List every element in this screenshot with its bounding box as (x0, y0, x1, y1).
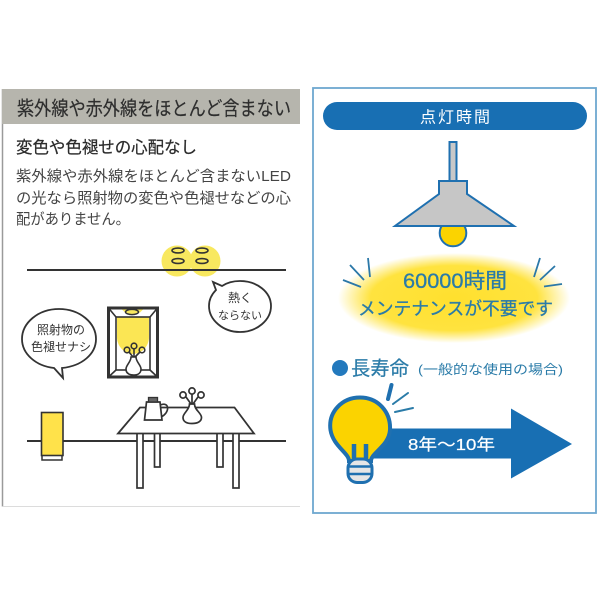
picture frame with vase (108, 308, 158, 377)
long life heading: (一般的な使用の場合) (418, 361, 563, 377)
body text: の光なら照射物の変色や色褪せなどの心 (16, 190, 291, 207)
vase on table (180, 388, 204, 424)
icon: light bulb (330, 385, 413, 482)
panel: left, no UV or IR (2, 89, 300, 507)
heading pill (323, 102, 587, 130)
glow with rays and message (338, 253, 570, 343)
body text: 紫外線や赤外線をほとんど含まないLED (16, 168, 291, 185)
long life heading (332, 358, 563, 380)
heading pill: 点灯時間 (420, 108, 490, 126)
speech bubble: no fading: 色褪せナシ (31, 340, 91, 354)
icon: pendant lamp (395, 142, 514, 246)
heading band: 紫外線や赤外線をほとんど含まない (17, 98, 291, 120)
speech bubble: not hot: 熱く (228, 291, 252, 305)
arrow: 8 to 10 years (368, 408, 572, 478)
glow with rays and message: 60000時間 (403, 270, 507, 293)
glow with rays and message: メンテナンスが不要です (358, 299, 553, 319)
speech bubble: not hot (209, 281, 271, 332)
subheading: 変色や色褪せの心配なし (16, 139, 197, 157)
body text (16, 168, 291, 228)
floor lamp (42, 412, 63, 460)
speech bubble: not hot: ならない (218, 309, 262, 322)
long life heading: 長寿命 (351, 358, 409, 380)
table (118, 408, 254, 488)
body text: 配がありません。 (16, 211, 130, 228)
panel: right, lighting time (313, 88, 596, 513)
speech bubble: no fading (22, 309, 96, 378)
speech bubble: no fading: 照射物の (37, 322, 85, 337)
ceiling line (27, 269, 286, 271)
heading band (2, 89, 300, 124)
floor line (27, 440, 286, 442)
kettle (144, 398, 168, 420)
icon: ceiling downlights (162, 246, 220, 276)
arrow: 8 to 10 years: 8年〜10年 (408, 436, 495, 454)
